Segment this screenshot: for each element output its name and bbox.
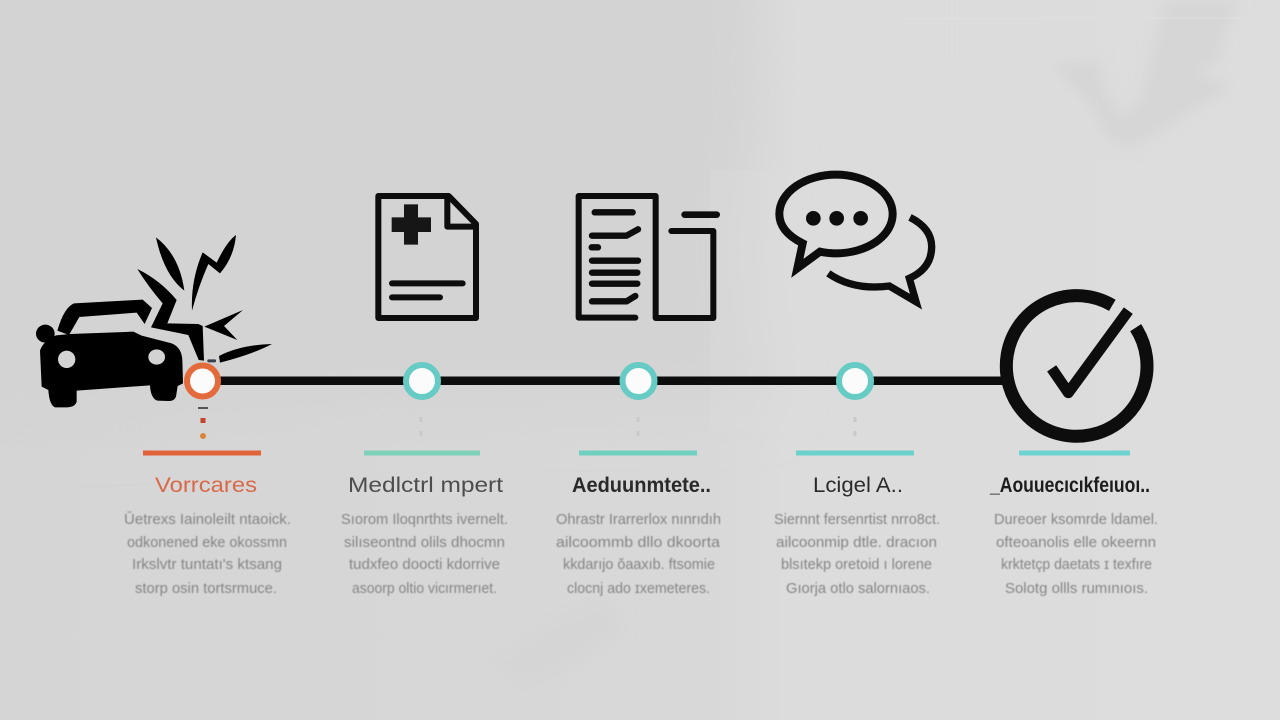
description: Ūetrexs Iainoleilt ntaoick.: [124, 511, 291, 528]
node 4 teal: [839, 365, 871, 436]
node 2 teal: [406, 365, 438, 436]
heading: _Aouuecıcıkfeıuoı..: [989, 474, 1150, 497]
heading: Vorrcares: [155, 474, 257, 497]
accent bar: [796, 450, 914, 456]
description: ailcoommb dllo dkoorta: [556, 534, 721, 551]
step 3: assessment: [556, 450, 721, 597]
heading: Medlctrl mpert: [348, 474, 503, 497]
description: Gıorja otlo salornıaos.: [786, 580, 930, 597]
car roof: [57, 300, 152, 335]
description: kkdarıjo ǒaaxıb. ftsomie: [563, 556, 715, 573]
rear page line: [685, 205, 717, 225]
spark right: [219, 344, 272, 363]
document lines: [392, 283, 463, 297]
step 2: medical report: [341, 450, 508, 597]
description: asoorp oltio vicırmerıet.: [352, 580, 497, 597]
node 1 orange: [187, 366, 218, 439]
spark zigzag: [192, 235, 236, 311]
spark left: [156, 237, 184, 291]
description: Siernnt fersenrtist nrro8ct.: [774, 511, 940, 528]
icon: medical document: [378, 196, 476, 318]
description: Irkslvtr tuntatı's ktsang: [132, 556, 282, 573]
icon: speech bubbles: [779, 175, 932, 302]
step 1: accident: [124, 450, 291, 597]
description: Sıorom Iloqnrthts ivernelt.: [341, 511, 508, 528]
heading: Lcigel A..: [813, 474, 903, 497]
accent bar: [579, 450, 697, 456]
description: blsıtekp oretoid ı lorene: [781, 556, 932, 573]
description: storp osin tortsrmuce.: [135, 580, 277, 597]
spark arrow: [204, 310, 243, 340]
description: [994, 511, 1158, 597]
text lines: [592, 212, 638, 301]
description: krktetçp daetats ɪ texfıre: [1001, 556, 1152, 573]
description: [774, 511, 940, 597]
heading: Aeduunmtete..: [572, 474, 711, 497]
node 3 teal: [622, 365, 654, 436]
car mirror: [36, 325, 55, 343]
front page: [579, 196, 713, 318]
timeline line: [215, 376, 1010, 385]
description: odkonened eke okossmn: [127, 534, 287, 551]
folded corner: [447, 197, 476, 227]
description: Dureoer ksomrde ldamel.: [994, 511, 1158, 528]
accent bar: [364, 450, 480, 456]
description: ofteoanolis elle okeernn: [996, 534, 1156, 551]
description: Solotg ollls rumınıoıs.: [1005, 580, 1148, 597]
ring: [1006, 296, 1147, 436]
description: clocnj ado ɪxemeteres.: [567, 580, 710, 597]
description: ailcoonmip dtle. dracıon: [776, 534, 937, 551]
check mark: [1052, 311, 1128, 393]
step 5: resolution: [989, 450, 1158, 597]
dots: [806, 211, 868, 226]
step 4: legal action: [774, 450, 940, 597]
description: [341, 511, 508, 597]
lower bubble: [828, 217, 932, 302]
description: [124, 511, 291, 597]
medical cross: [392, 204, 431, 245]
description: silıseontnd olils dhocmn: [344, 534, 505, 551]
description: Ohrastr Irarrerlox nınrıdıh: [556, 511, 721, 528]
document outline: [378, 196, 476, 318]
icon: check mark circle: [1006, 296, 1147, 436]
accent bar: [143, 450, 261, 456]
description: [556, 511, 721, 597]
accent bar: [1019, 450, 1130, 456]
icon: car crash: [36, 235, 272, 407]
icon: accident report pages: [579, 196, 717, 318]
car body: [40, 332, 183, 407]
crash crack: [137, 269, 204, 361]
description: tudxfeo doocti kdorrive: [349, 556, 500, 573]
upper bubble: [779, 175, 893, 268]
